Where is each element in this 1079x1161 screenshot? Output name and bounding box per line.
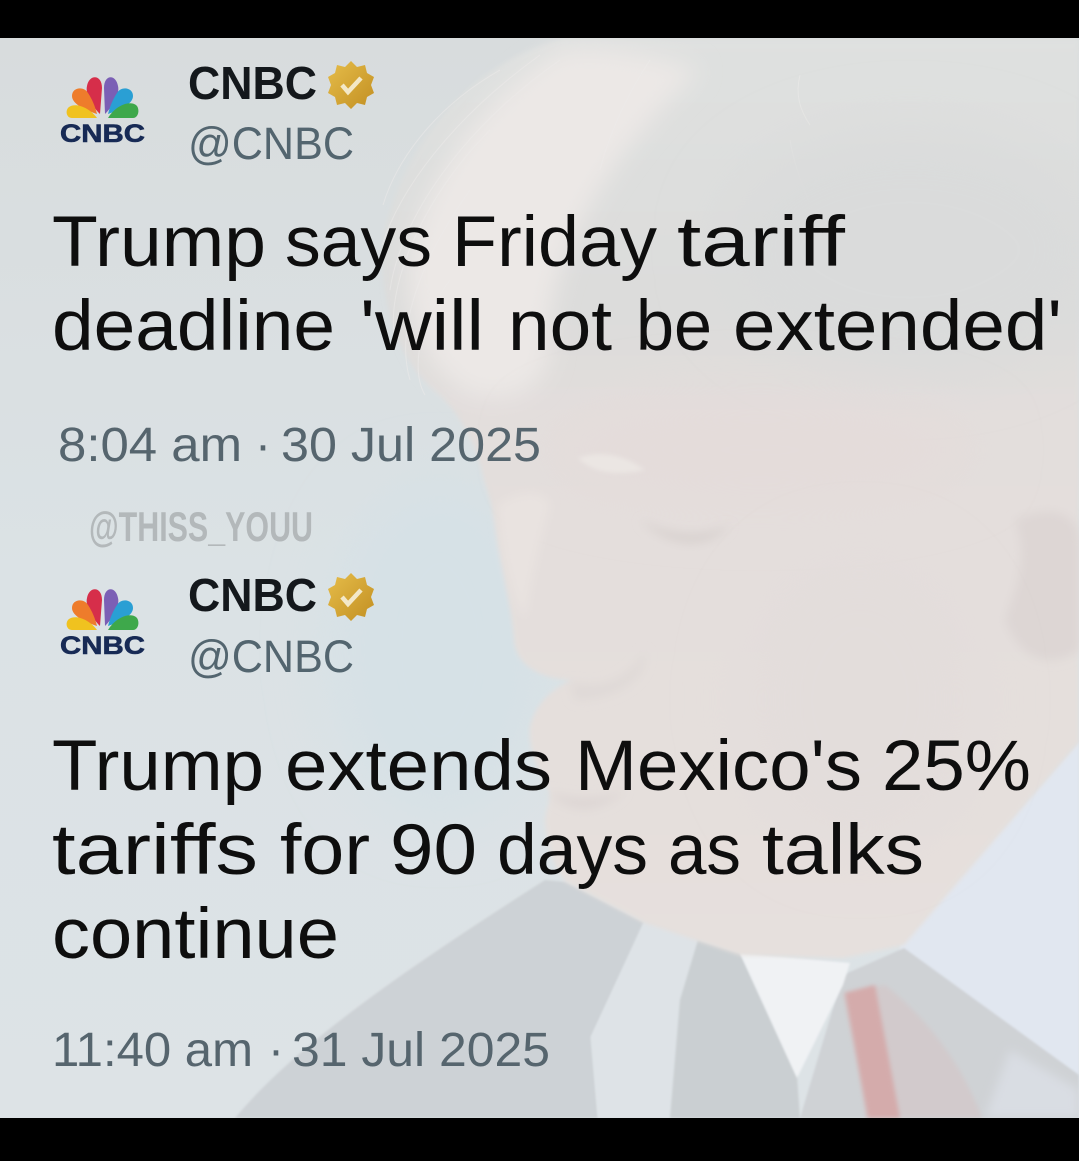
portrait: tie knot shadow [670, 940, 800, 1118]
icon: gold verified badge [328, 61, 374, 109]
icon: CNBC peacock logo: CNBC [60, 632, 145, 660]
headline [52, 727, 1031, 974]
bottom black bar [0, 1118, 1079, 1161]
headline: as [668, 811, 741, 890]
account name: CNBC [188, 569, 317, 621]
timestamp: · [268, 1024, 284, 1077]
headline: tariff [677, 203, 845, 282]
portrait: cheek shade [740, 550, 980, 850]
account handle: @CNBC [188, 631, 354, 682]
headline: not [508, 287, 612, 366]
portrait: hair strands [382, 82, 480, 395]
headline: be [636, 287, 712, 366]
headline: Trump [52, 727, 264, 806]
headline: Mexico's [575, 727, 862, 806]
timestamp: 8:04 am [58, 419, 242, 472]
portrait: shirt right [900, 742, 1079, 1080]
portrait: upper head shade [720, 130, 1079, 370]
portrait: right lapel [800, 948, 1079, 1118]
icon: gold verified badge [328, 573, 374, 621]
portrait: white shirt gore [740, 953, 850, 1078]
headline: continue [52, 895, 339, 974]
headline: tariffs [52, 811, 258, 890]
tweet 2 [52, 569, 1031, 1077]
portrait: ear shade [1018, 522, 1068, 654]
headline [52, 203, 1062, 366]
portrait: nose and mouth shade [570, 650, 646, 700]
timestamp: 30 Jul 2025 [281, 419, 541, 472]
portrait: left collar [620, 924, 644, 974]
portrait: forehead tint [540, 400, 980, 500]
timestamp: · [255, 419, 271, 472]
icon: CNBC peacock logo: CNBC [60, 120, 145, 148]
headline: says [285, 203, 432, 282]
top black bar [0, 0, 1079, 38]
timestamp: 31 Jul 2025 [292, 1024, 550, 1077]
headline: extends [285, 727, 552, 806]
portrait: hair highlight [408, 48, 700, 398]
portrait: jacket [235, 880, 645, 1118]
icon: CNBC peacock logo [60, 589, 145, 660]
portrait: head silhouette [458, 410, 1077, 956]
portrait: tie [879, 988, 976, 1118]
headline: 90 [390, 811, 477, 890]
watermark: @THISS_YOUU [89, 503, 313, 550]
headline: days [497, 811, 648, 890]
headline: extended' [733, 287, 1062, 366]
headline: deadline [52, 287, 335, 366]
portrait: blue tint beside face [330, 480, 550, 820]
headline: for [280, 811, 370, 890]
account handle: @CNBC [188, 118, 354, 169]
timestamp: 11:40 am [52, 1024, 253, 1077]
headline: 25% [882, 727, 1031, 806]
portrait: eye lid line [675, 535, 704, 540]
headline: Friday [452, 203, 658, 282]
portrait: shirt lower right [990, 1055, 1078, 1116]
account name: CNBC [188, 57, 317, 109]
portrait: eye socket shade [498, 494, 550, 620]
headline: 'will [360, 287, 484, 366]
tweet 1 [52, 57, 1062, 472]
icon: CNBC peacock logo [60, 77, 145, 148]
portrait: brow highlight [584, 456, 637, 471]
headline: talks [762, 811, 924, 890]
headline: Trump [52, 203, 266, 282]
